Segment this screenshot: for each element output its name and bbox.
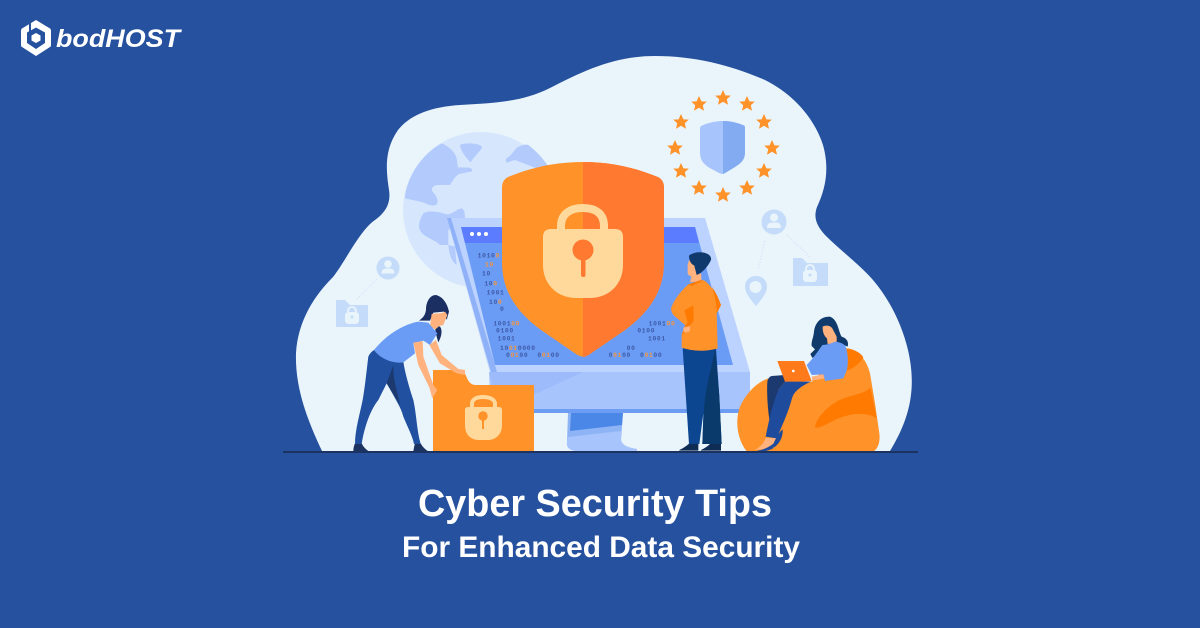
binary code text: 0100: [637, 327, 655, 334]
icon: location pin: [745, 276, 767, 306]
monitor chin: [489, 372, 752, 413]
icon: right user circle: [762, 210, 786, 234]
binary code text: 00100: [506, 352, 528, 359]
monitor stand: [567, 413, 637, 451]
woman shoes: [353, 443, 428, 451]
globe: [403, 132, 559, 288]
monitor: [447, 218, 752, 413]
monitor bezel: [447, 218, 750, 372]
woman trousers: [355, 350, 421, 444]
window dots: [470, 232, 488, 236]
woman arms: [413, 340, 465, 398]
laptop: [777, 361, 812, 382]
standing man: [671, 252, 722, 451]
man legs: [679, 348, 722, 451]
beanbag: [737, 348, 880, 451]
small shield: [700, 121, 745, 174]
binary code text: [478, 253, 675, 359]
woman face: [430, 312, 447, 329]
monitor bezel left edge: [447, 218, 497, 372]
woman hair: [810, 317, 848, 358]
woman neck and face: [823, 326, 837, 344]
woman hair: [419, 295, 449, 342]
dotted connectors: [356, 235, 810, 300]
binary code text: 0: [500, 306, 504, 313]
icon: left folder with lock: [336, 300, 368, 327]
woman far leg: [767, 375, 785, 423]
woman foot: [755, 438, 777, 450]
seated woman on beanbag: [737, 317, 880, 452]
folder padlock: [465, 397, 502, 440]
ground line: [283, 451, 918, 453]
binary code text: 00100: [609, 352, 631, 359]
woman near leg: [766, 382, 811, 438]
binary code text: 0100: [496, 327, 514, 334]
binary code text: 00100: [537, 352, 560, 359]
monitor chin edge: [490, 409, 751, 413]
binary code text: 100: [484, 280, 498, 287]
main shield with lock: [502, 162, 664, 357]
logo: bodHOST: [21, 20, 183, 56]
binary code text: 00: [627, 345, 636, 352]
binary code text: 1001: [498, 336, 516, 343]
binary code text: 00100: [640, 352, 662, 359]
binary code text: 100100: [493, 320, 520, 327]
binary code text: 1001: [487, 289, 505, 296]
icon: left user circle: [376, 256, 400, 280]
logo wordmark: bodHOST: [56, 25, 183, 53]
binary code text: 1001: [648, 336, 666, 343]
orange folder with lock: [433, 370, 534, 451]
man upper body: [671, 252, 721, 351]
subtitle: For Enhanced Data Security: [402, 531, 800, 564]
ring of stars: [667, 90, 780, 202]
bending woman: [353, 295, 465, 451]
binary code text: 10: [485, 262, 494, 269]
monitor screen header bar: [461, 227, 699, 243]
woman sweater: [807, 342, 848, 381]
background blob: [296, 56, 912, 451]
woman shirt: [374, 322, 437, 363]
woman hand: [812, 374, 824, 381]
binary code text: 10: [482, 271, 491, 278]
binary code text: 100: [489, 299, 502, 306]
icon: hexagon logo mark: [21, 20, 51, 56]
binary code text: 10100: [478, 253, 500, 260]
monitor screen: [461, 227, 733, 365]
padlock: [543, 208, 623, 298]
binary code text: 10010000: [500, 345, 536, 352]
binary code text: 100100: [649, 320, 675, 327]
globe continents: [405, 143, 548, 265]
icon: right folder with lock: [793, 258, 828, 286]
woman shoes: [754, 429, 783, 452]
title: Cyber Security Tips: [418, 483, 772, 525]
